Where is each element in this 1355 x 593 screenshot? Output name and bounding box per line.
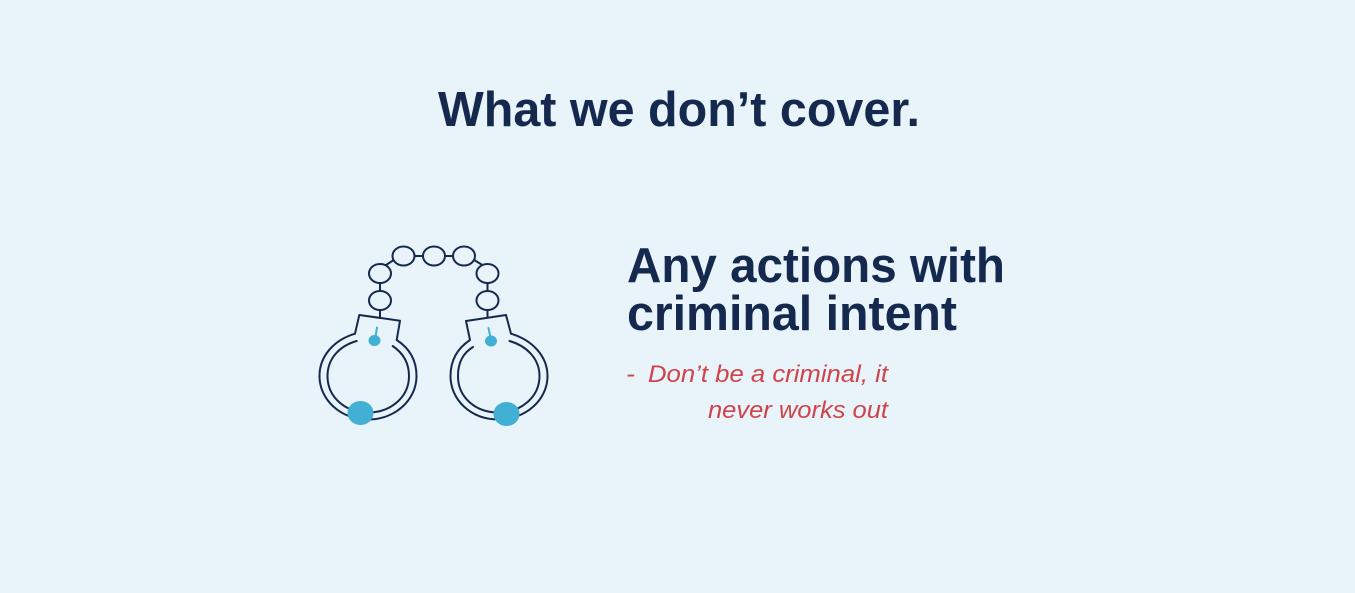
icon: handcuffs xyxy=(320,246,548,426)
right cuff xyxy=(450,315,548,426)
quote text: - xyxy=(626,361,635,388)
left cuff xyxy=(320,315,416,425)
title: What we don’t cover. xyxy=(438,83,920,137)
quote text: never works out xyxy=(708,397,889,424)
heading: any actions with criminal intent xyxy=(627,239,1005,341)
chain links xyxy=(369,246,498,317)
quote text: Don’t be a criminal, it xyxy=(648,361,889,388)
quote text xyxy=(626,361,889,424)
heading: any actions with criminal intent: criminal intent xyxy=(627,287,957,341)
heading: any actions with criminal intent: Any actions with xyxy=(627,239,1005,293)
